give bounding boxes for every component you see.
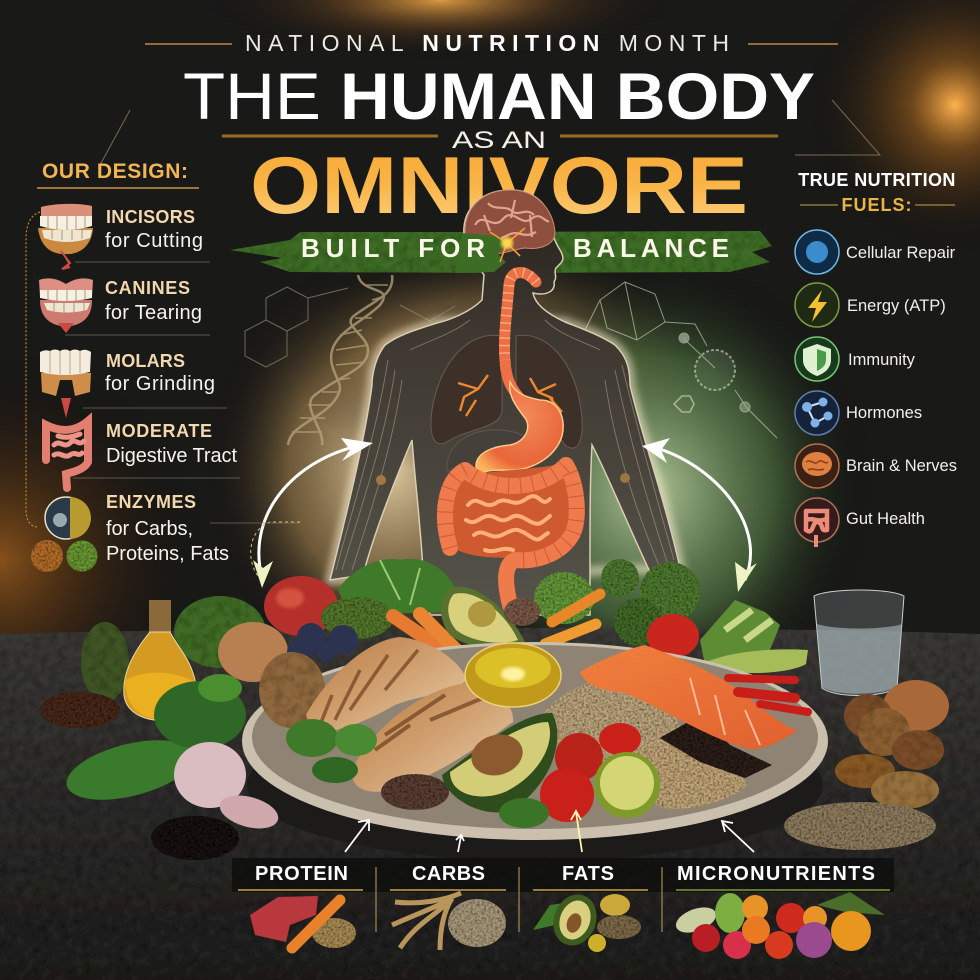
human figure bbox=[330, 190, 680, 615]
left table foods bbox=[40, 674, 282, 860]
icon: enzyme circles bbox=[31, 497, 98, 572]
small intestine bbox=[466, 496, 550, 551]
oats pile bbox=[784, 802, 936, 850]
energy bbox=[795, 283, 946, 327]
avocado back bbox=[441, 587, 526, 649]
label: MOLARS bbox=[106, 351, 185, 371]
DNA helix bbox=[288, 275, 392, 445]
cellular repair: Cellular Repair bbox=[846, 244, 956, 262]
protein foods bbox=[250, 896, 356, 948]
molars bbox=[40, 350, 215, 418]
molecule network left bbox=[245, 287, 455, 367]
label: carbs: CARBS bbox=[412, 863, 485, 885]
segmentation bbox=[445, 465, 577, 560]
parsley bbox=[499, 798, 549, 828]
liver bbox=[447, 430, 528, 480]
tomato back bbox=[647, 614, 699, 658]
slate under plate bbox=[247, 709, 823, 861]
icon: molars bbox=[40, 350, 91, 418]
label: ENZYMES bbox=[106, 492, 196, 512]
panel: true nutrition fuels bbox=[795, 100, 957, 547]
label: fats: FATS bbox=[562, 863, 614, 885]
enzymes bbox=[31, 492, 229, 572]
gut health bbox=[795, 498, 925, 547]
nutrient labels bbox=[255, 863, 875, 885]
panel heading: FUELS: bbox=[842, 195, 912, 215]
description: Digestive Tract bbox=[106, 445, 237, 467]
background food row bbox=[81, 559, 904, 720]
label: micronutrients: MICRONUTRIENTS bbox=[677, 863, 875, 885]
oil dish bbox=[465, 643, 561, 707]
basil bbox=[286, 719, 377, 783]
plate rim bbox=[242, 642, 828, 840]
intestines bbox=[444, 462, 578, 605]
spinach bbox=[61, 674, 246, 811]
arm nerves bbox=[336, 320, 674, 570]
panel: our design bbox=[26, 110, 300, 572]
icon: canines bbox=[39, 278, 93, 333]
body halo bbox=[330, 321, 680, 580]
garlic bbox=[174, 742, 282, 834]
description: for Grinding bbox=[105, 373, 215, 395]
broccoli left bbox=[321, 597, 393, 639]
description line one: for Carbs, bbox=[106, 518, 193, 540]
tomatoes bbox=[540, 723, 641, 822]
table surface bbox=[0, 628, 980, 980]
gut health: Gut Health bbox=[846, 510, 925, 528]
immunity: Immunity bbox=[848, 351, 916, 369]
nuts bbox=[259, 652, 325, 728]
energy: Energy (ATP) bbox=[847, 297, 946, 315]
plate surface bbox=[252, 645, 818, 829]
banner text: built for: BUILT FOR bbox=[301, 233, 485, 263]
header text block bbox=[183, 30, 815, 231]
chicken front bbox=[352, 683, 513, 792]
cucumbers bbox=[700, 600, 808, 673]
stomach bbox=[476, 382, 563, 480]
walnuts bbox=[835, 694, 944, 809]
banner left segment bbox=[301, 228, 525, 273]
label: INCISORS bbox=[106, 207, 195, 227]
cellular repair bbox=[795, 230, 956, 274]
micronutrient foods bbox=[673, 892, 885, 959]
water glass bbox=[814, 590, 904, 696]
title: The Human Body: THE HUMAN BODY bbox=[183, 59, 815, 133]
rice bbox=[530, 677, 683, 770]
incisors bbox=[38, 204, 203, 269]
large intestine bbox=[445, 465, 577, 605]
egg bbox=[218, 622, 288, 682]
label: protein: PROTEIN bbox=[255, 863, 348, 885]
apple bbox=[264, 576, 338, 636]
canines bbox=[39, 278, 202, 333]
oil bottle bbox=[124, 600, 196, 720]
arrow: right food to body bbox=[642, 438, 757, 592]
egg bbox=[883, 680, 949, 732]
greens left bbox=[81, 596, 266, 702]
hormones bbox=[795, 391, 922, 435]
brain bbox=[465, 190, 555, 254]
avocado front bbox=[442, 713, 557, 812]
arrow: left food to body bbox=[251, 438, 373, 588]
description: for Tearing bbox=[105, 302, 202, 324]
immunity bbox=[795, 337, 916, 381]
label band bbox=[232, 858, 894, 892]
digestive tract bbox=[46, 421, 237, 488]
brain spark bbox=[490, 228, 525, 262]
carbs foods bbox=[392, 893, 506, 950]
label: CANINES bbox=[105, 278, 190, 298]
black beans bbox=[660, 715, 772, 778]
peppers bbox=[728, 678, 808, 712]
hormones: Hormones bbox=[846, 404, 922, 422]
panel heading: TRUE NUTRITION bbox=[798, 170, 956, 190]
brain and nerves bbox=[795, 444, 957, 488]
icon: incisors bbox=[38, 204, 93, 269]
carrots bbox=[393, 594, 600, 656]
spices bbox=[40, 692, 239, 860]
dark beans bbox=[381, 774, 449, 810]
brain and nerves: Brain & Nerves bbox=[846, 457, 957, 475]
icon: intestine bbox=[46, 421, 88, 488]
grains bbox=[633, 743, 748, 809]
panel heading: OUR DESIGN: bbox=[42, 160, 188, 183]
label: MODERATE bbox=[106, 421, 212, 441]
description line two: Proteins, Fats bbox=[106, 543, 229, 565]
lettuce greens bbox=[338, 559, 456, 615]
fats foods bbox=[533, 888, 641, 952]
title: Omnivore: OMNIVORE bbox=[250, 141, 748, 231]
body silhouette bbox=[330, 190, 680, 615]
pointer arrows bbox=[345, 811, 754, 852]
molecule network right bbox=[585, 282, 777, 438]
banner text: balance: BALANCE bbox=[573, 233, 729, 263]
description: for Cutting bbox=[105, 230, 203, 252]
title: as an: AS AN bbox=[452, 127, 546, 154]
esophagus bbox=[504, 273, 536, 405]
chicken back bbox=[306, 637, 467, 731]
green banner bbox=[230, 231, 772, 273]
eyebrow: National Nutrition Month: NATIONAL NUTRITION MONTH bbox=[245, 30, 729, 56]
blueberries bbox=[287, 623, 358, 665]
plate of food bbox=[242, 637, 828, 861]
mushroom bbox=[504, 598, 540, 626]
right broccoli bbox=[534, 559, 700, 646]
lungs bbox=[431, 335, 582, 448]
salmon bbox=[580, 645, 798, 749]
right table foods bbox=[784, 680, 949, 850]
lime bbox=[594, 752, 660, 818]
